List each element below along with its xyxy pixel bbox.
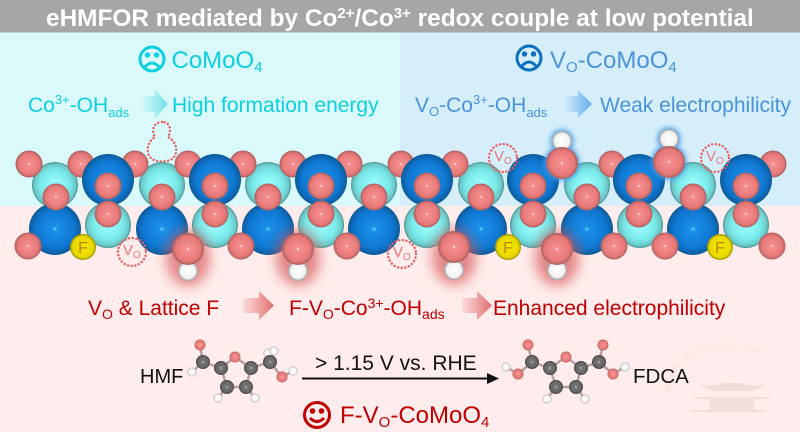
heading: CoMoO4 [140,47,263,76]
label: FDCA: FDCA [633,365,689,388]
label: HMF: HMF [140,366,183,388]
oxygen vacancy markers: V [393,244,403,261]
fluorine atoms: F [715,240,725,257]
top teal Co atoms [32,162,716,208]
fluorine atoms: F [78,240,88,257]
adsorbed OH groups, lower [172,231,573,281]
fluorine atoms [70,234,733,260]
text: Co3+-OHads high formation energy: High formation energy [172,94,379,117]
oxygen vacancy markers: V [494,148,504,165]
background panel: CoMoO4 [0,32,400,206]
text: VO and lattice F pathway [88,291,726,322]
reaction arrow with potential label: > 1.15 V vs. RHE [315,352,477,375]
title bar: eHMFOR mediated by Co [46,5,337,32]
adsorbed OH groups, upper [546,129,685,179]
bottom row oxygen atoms [14,232,786,260]
text: VO and lattice F pathway: V [88,297,102,320]
text: VO-Co3+-OHads weak electrophilicity [415,90,792,120]
crystal lattice slab [14,122,786,286]
watermark: university building: WWW.WHU.EDU.CN [664,342,760,391]
oxygen vacancy markers: O [403,252,411,263]
icon: sad face blue [517,46,541,70]
icon: sad face cyan [140,47,164,71]
text: VO and lattice F pathway: -OH [384,297,422,320]
title bar: /Co [354,5,394,32]
heading: F-VO-CoMoO4 [304,402,489,431]
arrow: blue [566,90,592,118]
text: VO and lattice F pathway: ads [422,306,445,322]
molecule: HMF [188,340,298,402]
heading: F-VO-CoMoO4: O [379,414,390,431]
oxygen vacancy markers [118,144,729,268]
background panel: F-Vo-CoMoO4 [0,206,800,432]
text: VO and lattice F pathway: Enhanced electrophilicity [493,297,726,320]
text: VO and lattice F pathway: O [323,306,334,322]
arrow: red 2 [462,291,492,320]
title bar: 2+ [337,5,355,22]
text: VO-Co3+-OHads weak electrophilicity: 3+ [473,92,488,107]
text: VO and lattice F pathway: O [102,306,113,322]
text: Co3+-OHads high formation energy: Co [28,94,55,117]
title bar: redox couple at low potential [411,5,754,32]
text: VO-Co3+-OHads weak electrophilicity: Weak electrophilicity [600,94,792,117]
text: VO and lattice F pathway: 3+ [368,295,384,311]
background panel: Vo-CoMoO4 [400,32,800,206]
text: VO and lattice F pathway: & Lattice F [113,297,219,320]
oxygen vacancy markers: V [123,242,133,259]
text: VO-Co3+-OHads weak electrophilicity: O [429,104,439,119]
oxygen vacancy markers: V [706,148,716,165]
text: VO and lattice F pathway: -Co [334,297,368,320]
blue glow behind adsorbed OH [544,127,687,181]
text: VO-Co3+-OHads weak electrophilicity: V [415,94,429,117]
text: VO-Co3+-OHads weak electrophilicity: -Co [439,94,473,117]
top row oxygen atoms [16,150,786,178]
title bar: 3+ [394,5,411,22]
oxygen vacancy markers: O [133,250,141,261]
heading: F-VO-CoMoO4: 4 [481,414,489,431]
molecule: FDCA [502,340,630,404]
text: VO-Co3+-OHads weak electrophilicity: -OH [488,94,526,117]
heading: VO-CoMoO4: -CoMoO [578,47,668,74]
watermark: university building [664,342,770,412]
reaction arrow with potential label [302,352,499,384]
top blue Mo atoms [82,154,772,206]
icon: happy face red [304,402,330,428]
heading: VO-CoMoO4: V [550,47,566,74]
oxygen vacancy markers: O [716,156,724,167]
text: Co3+-OHads high formation energy: ads [108,105,130,120]
inner oxygen atoms [42,172,760,228]
heading: CoMoO4: CoMoO [172,47,254,74]
arrow: red 1 [243,291,274,320]
heading: CoMoO4: 4 [254,59,263,76]
dotted OH formation outline [148,122,176,162]
fluorine atoms: F [503,240,513,257]
bottom blue Mo atoms [29,203,719,255]
text: Co3+-OHads high formation energy [28,90,379,120]
arrow: cyan [143,90,168,118]
heading: VO-CoMoO4: O [566,59,578,76]
title bar [0,0,800,32]
red glow behind adsorbed OH [166,229,579,286]
heading: F-VO-CoMoO4: F-V [340,402,379,429]
bottom teal Co atoms [85,202,769,248]
heading: F-VO-CoMoO4: -CoMoO [390,402,481,429]
text: VO-Co3+-OHads weak electrophilicity: ads [526,105,548,120]
heading: VO-CoMoO4 [517,46,677,76]
oxygen vacancy markers: O [504,156,512,167]
text: VO and lattice F pathway: F-V [289,297,323,320]
text: Co3+-OHads high formation energy: 3+ [55,92,70,107]
heading: VO-CoMoO4: 4 [668,59,677,76]
text: Co3+-OHads high formation energy: -OH [70,94,108,117]
